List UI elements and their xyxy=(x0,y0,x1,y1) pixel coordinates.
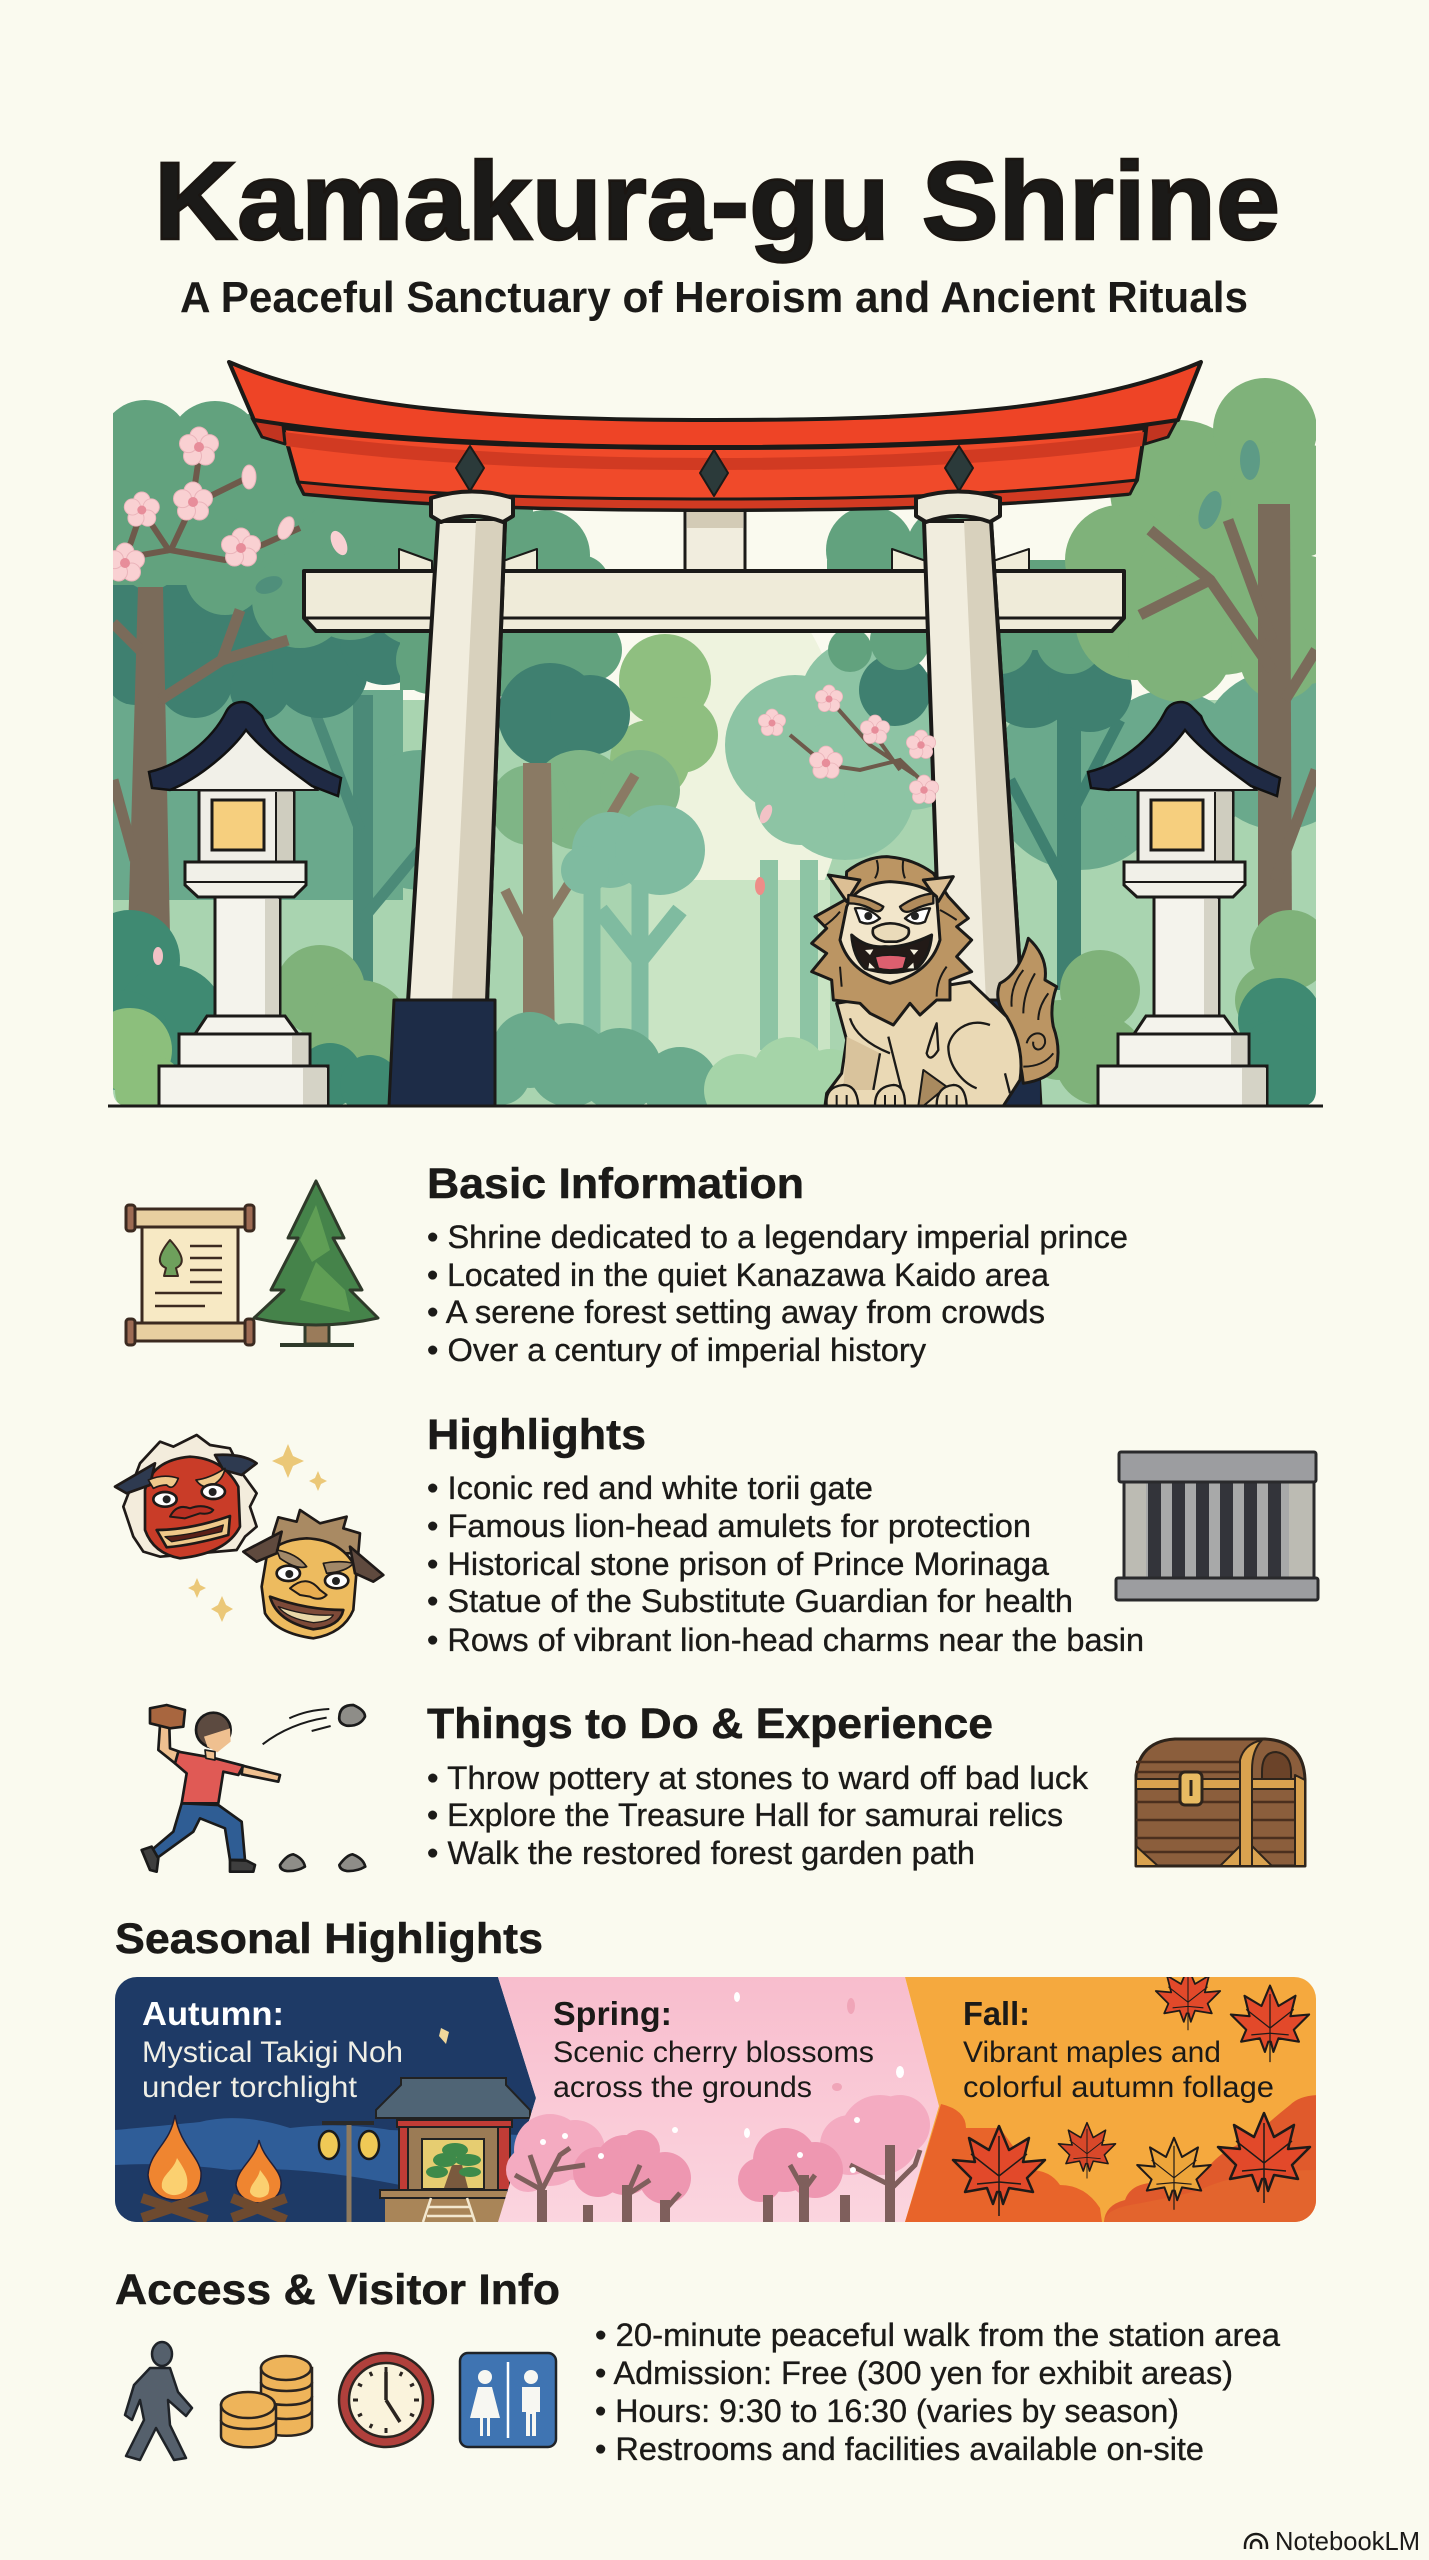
left upper canopy xyxy=(100,400,622,700)
text: fall: Fall: xyxy=(963,1995,1030,2032)
watermark: NotebookLM: NotebookLM xyxy=(1275,2526,1420,2556)
text: autumn xyxy=(142,1995,403,2104)
icon: treasure chest xyxy=(1136,1739,1305,1866)
lion pedestal shadow xyxy=(1007,1080,1040,1107)
section: highlights xyxy=(115,1411,1318,1658)
list: access and visitor info: • Restrooms and facilities available on-site xyxy=(595,2431,1204,2467)
list: highlights: • Iconic red and white torii gate xyxy=(427,1470,873,1506)
icon: scroll xyxy=(126,1205,254,1345)
panel: fall xyxy=(905,1967,1320,2222)
icon: yellow lion mask xyxy=(243,1510,383,1638)
bonfires xyxy=(142,2115,286,2220)
torii wedges xyxy=(399,549,1029,571)
list: access and visitor info: • Admission: Free (300 yen for exhibit areas) xyxy=(595,2355,1233,2391)
icon: pine tree xyxy=(254,1181,378,1345)
panel: spring xyxy=(498,1977,939,2222)
section: basic information xyxy=(126,1160,1128,1368)
text: autumn: Mystical Takigi Noh xyxy=(142,2036,403,2069)
heading: highlights: Highlights xyxy=(427,1411,646,1459)
torii left pillar xyxy=(389,492,513,1106)
list: highlights: • Rows of vibrant lion-head charms near the basin xyxy=(427,1622,1144,1658)
text: spring: across the grounds xyxy=(553,2071,812,2104)
lamp post xyxy=(319,2123,379,2222)
list: highlights xyxy=(427,1470,1144,1658)
torii diamonds xyxy=(456,446,973,496)
list: things to do: • Walk the restored forest garden path xyxy=(427,1835,975,1871)
icon: stone prison xyxy=(1116,1452,1318,1600)
icon: red lion mask xyxy=(115,1435,257,1558)
noh stage xyxy=(376,2078,530,2222)
section: things to do xyxy=(142,1700,1305,1872)
torii gate xyxy=(229,362,1201,1106)
list: basic information xyxy=(427,1219,1128,1368)
text: spring: Spring: xyxy=(553,1995,672,2032)
left trunk xyxy=(128,587,170,935)
right-of-centre canopies xyxy=(859,650,1132,732)
list: access and visitor info: • 20-minute peaceful walk from the station area xyxy=(595,2317,1280,2353)
icon: coins xyxy=(221,2356,312,2447)
icon: person throwing stone xyxy=(142,1705,365,1872)
heading: access and visitor info: Access & Visitor Info xyxy=(115,2266,560,2314)
text: spring xyxy=(553,1995,874,2104)
text: autumn: under torchlight xyxy=(142,2071,358,2104)
panel: seasonal band xyxy=(115,1967,1320,2222)
mid blossom branch xyxy=(758,685,939,804)
heading: things to do: Things to Do & Experience xyxy=(427,1700,993,1748)
icon: sparkles xyxy=(188,1444,327,1622)
komainu lion statue xyxy=(812,857,1058,1107)
falling petals xyxy=(153,947,163,965)
centre-left canopies xyxy=(610,634,718,800)
hero illustration: torii gate in forest xyxy=(70,362,1365,1126)
forest background xyxy=(70,378,1365,1126)
lion ears xyxy=(828,875,860,902)
right lantern xyxy=(1088,702,1280,1106)
bottom bushes xyxy=(113,910,214,1090)
list: highlights: • Famous lion-head amulets for protection xyxy=(427,1508,1031,1544)
left lantern xyxy=(149,702,341,1106)
text: autumn: Autumn: xyxy=(142,1995,284,2032)
right canopy xyxy=(1065,378,1316,702)
list: basic information: • A serene forest setting away from crowds xyxy=(427,1294,1045,1330)
left teal under-canopy xyxy=(113,585,400,720)
icon: restroom sign xyxy=(460,2353,556,2447)
text: fall: Vibrant maples and xyxy=(963,2036,1221,2069)
icon: clock xyxy=(339,2353,433,2447)
list: things to do: • Throw pottery at stones to ward off bad luck xyxy=(427,1760,1089,1796)
torii centre post xyxy=(685,502,745,572)
list: basic information: • Located in the quiet Kanazawa Kaido area xyxy=(427,1257,1049,1293)
list: access and visitor info: • Hours: 9:30 to 16:30 (varies by season) xyxy=(595,2393,1179,2429)
list: highlights: • Historical stone prison of Prince Morinaga xyxy=(427,1546,1049,1582)
heading: seasonal highlights: Seasonal Highlights xyxy=(115,1915,543,1963)
torii roof xyxy=(229,362,1201,510)
list: basic information: • Over a century of imperial history xyxy=(427,1332,926,1368)
text: spring: Scenic cherry blossoms xyxy=(553,2036,874,2069)
list: basic information: • Shrine dedicated to a legendary imperial prince xyxy=(427,1219,1128,1255)
lion face xyxy=(840,882,940,983)
torii crossbeam xyxy=(304,571,1124,631)
title: Kamakura-gu Shrine xyxy=(154,140,1280,263)
list: highlights: • Statue of the Substitute Guardian for health xyxy=(427,1583,1073,1619)
lion mane xyxy=(812,857,972,1025)
torii right pillar xyxy=(916,492,1041,1106)
subtitle: A Peaceful Sanctuary of Heroism and Ancient Rituals xyxy=(180,273,1248,322)
icon: walking person xyxy=(125,2342,192,2460)
panel: autumn night xyxy=(115,1977,536,2222)
lion body xyxy=(825,982,1021,1106)
text: fall: colorful autumn follage xyxy=(963,2071,1274,2104)
left blossom branch xyxy=(106,427,297,581)
list: things to do xyxy=(427,1760,1089,1871)
text: fall xyxy=(963,1995,1274,2104)
list: things to do: • Explore the Treasure Hall for samurai relics xyxy=(427,1797,1063,1833)
heading: basic information: Basic Information xyxy=(427,1160,804,1208)
list: access and visitor info xyxy=(595,2317,1280,2467)
ground line xyxy=(108,1104,1323,1108)
lion tail xyxy=(998,938,1058,1083)
